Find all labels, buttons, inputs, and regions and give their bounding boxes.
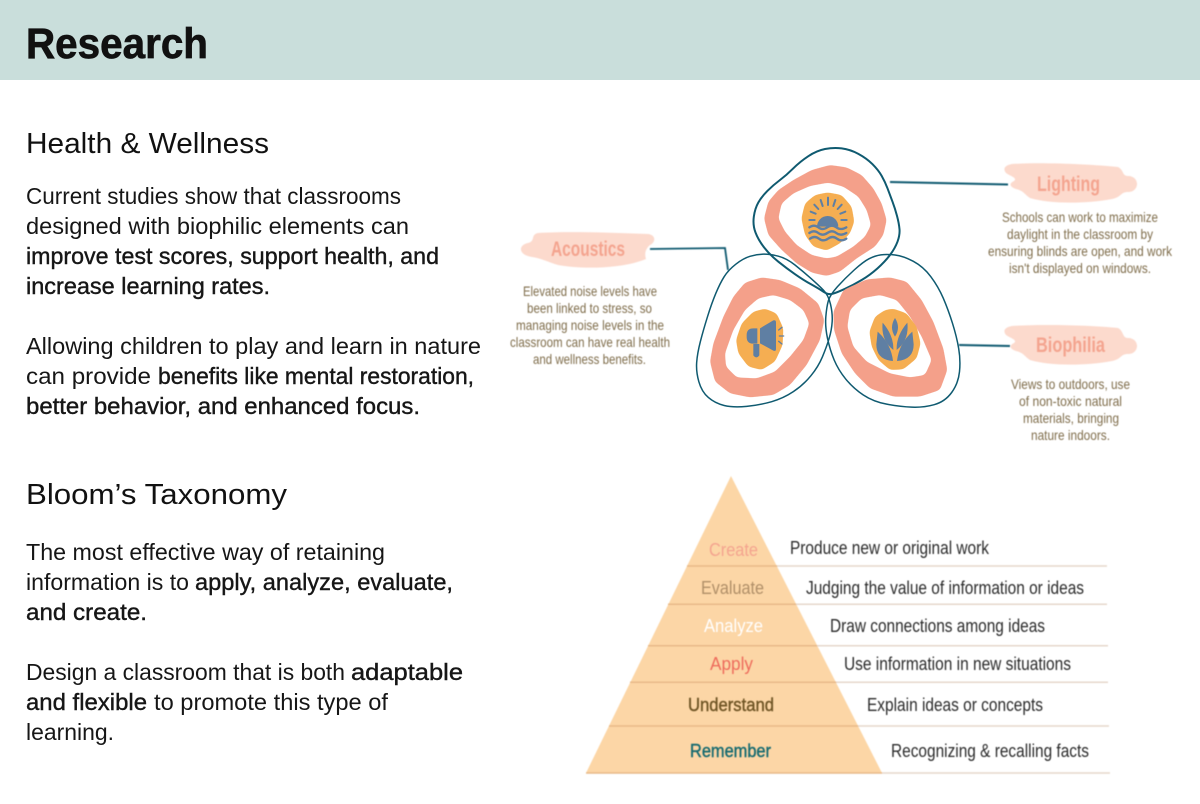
text block: nature benefits: can provide	[26, 363, 151, 389]
pyramid level labels	[688, 540, 774, 761]
callout: lighting	[988, 163, 1173, 276]
text block: biophilic classroom studies	[26, 183, 439, 299]
pyramid level labels: Remember	[690, 741, 771, 761]
level descriptions: Draw connections among ideas	[830, 616, 1045, 636]
pyramid level labels: Evaluate	[701, 578, 764, 598]
pyramid row dividers	[586, 566, 882, 773]
title: Research	[26, 20, 208, 68]
chart: Bloom's taxonomy pyramid	[586, 476, 1110, 773]
callout: lighting: Schools can work to maximize	[1002, 209, 1158, 225]
text block: retaining information	[26, 539, 453, 625]
callout: biophilia	[1004, 325, 1137, 443]
text block: adaptable classroom design: and flexible	[26, 689, 147, 715]
callout: lighting: ensuring blinds are open, and work	[988, 243, 1173, 259]
level descriptions	[790, 538, 1089, 761]
connector: biophilia	[959, 345, 1010, 346]
text block: adaptable classroom design: adaptable	[351, 659, 463, 685]
text block: biophilic classroom studies: improve test scores, support health, and	[26, 243, 439, 269]
callout: acoustics: been linked to stress, so	[527, 300, 652, 316]
blob: biophilia	[826, 254, 960, 407]
callout: acoustics: Elevated noise levels have	[523, 283, 657, 299]
pyramid level labels: Create	[709, 540, 758, 560]
text block: nature benefits: Allowing children to play and learn in nature	[26, 333, 481, 359]
level descriptions: Produce new or original work	[790, 538, 990, 558]
level descriptions: Explain ideas or concepts	[867, 695, 1043, 715]
text block: nature benefits: better behavior, and enhanced focus.	[26, 393, 420, 419]
text block: adaptable classroom design: Design a classroom that is both	[26, 659, 345, 685]
callout: lighting: isn't displayed on windows.	[1009, 260, 1151, 276]
text block: biophilic classroom studies: increase learning rates.	[26, 273, 270, 299]
pyramid level labels: Understand	[688, 695, 774, 715]
icon: leaf plant	[876, 318, 914, 361]
callout: biophilia: materials, bringing	[1023, 410, 1119, 426]
icon: megaphone	[747, 320, 784, 357]
description row rules	[777, 566, 1110, 773]
blob: lighting	[753, 148, 900, 294]
level descriptions: Recognizing & recalling facts	[891, 741, 1089, 761]
pyramid level labels: Analyze	[704, 616, 763, 636]
pyramid shape	[586, 476, 882, 773]
callout: biophilia: of non-toxic natural	[1019, 393, 1122, 409]
text block: retaining information: The most effective way of retaining	[26, 539, 385, 565]
text block: biophilic classroom studies: Current studies show that classrooms	[26, 183, 401, 209]
level descriptions: Judging the value of information or ideas	[806, 578, 1084, 598]
text block: adaptable classroom design	[26, 659, 463, 745]
callout: acoustics: managing noise levels in the	[516, 317, 664, 333]
connector: lighting	[890, 182, 1008, 184]
text block: retaining information: and create.	[26, 599, 147, 625]
callout: acoustics: and wellness benefits.	[533, 351, 646, 367]
callout: acoustics	[510, 232, 670, 367]
text block: retaining information: apply, analyze, evaluate,	[195, 569, 453, 595]
blob: acoustics	[697, 254, 832, 407]
diagram: three overlapping blobs	[697, 148, 960, 407]
callout: biophilia: Biophilia	[1036, 334, 1105, 357]
text block: retaining information: information is to	[26, 569, 189, 595]
text block: nature benefits: benefits like mental restoration,	[158, 363, 474, 389]
connector: acoustics	[650, 248, 728, 270]
text block: nature benefits	[26, 333, 481, 419]
level descriptions: Use information in new situations	[844, 654, 1071, 674]
callout: biophilia: nature indoors.	[1031, 427, 1110, 443]
text block: adaptable classroom design: learning.	[26, 719, 114, 745]
icon: sun over water	[809, 198, 847, 240]
callout: lighting: daylight in the classroom by	[1007, 226, 1153, 242]
heading: Health & Wellness: Health & Wellness	[26, 128, 269, 160]
text block: biophilic classroom studies: designed with biophilic elements can	[26, 213, 409, 239]
heading: Bloom's Taxonomy: Bloom’s Taxonomy	[26, 479, 288, 511]
callout: lighting: Lighting	[1037, 173, 1100, 196]
text block: adaptable classroom design: to promote this type of	[154, 689, 389, 715]
header band	[0, 0, 1200, 80]
callout: biophilia: Views to outdoors, use	[1011, 376, 1130, 392]
callout: acoustics: classroom can have real health	[510, 334, 670, 350]
pyramid level labels: Apply	[710, 654, 753, 674]
callout: acoustics: Acoustics	[551, 238, 625, 261]
